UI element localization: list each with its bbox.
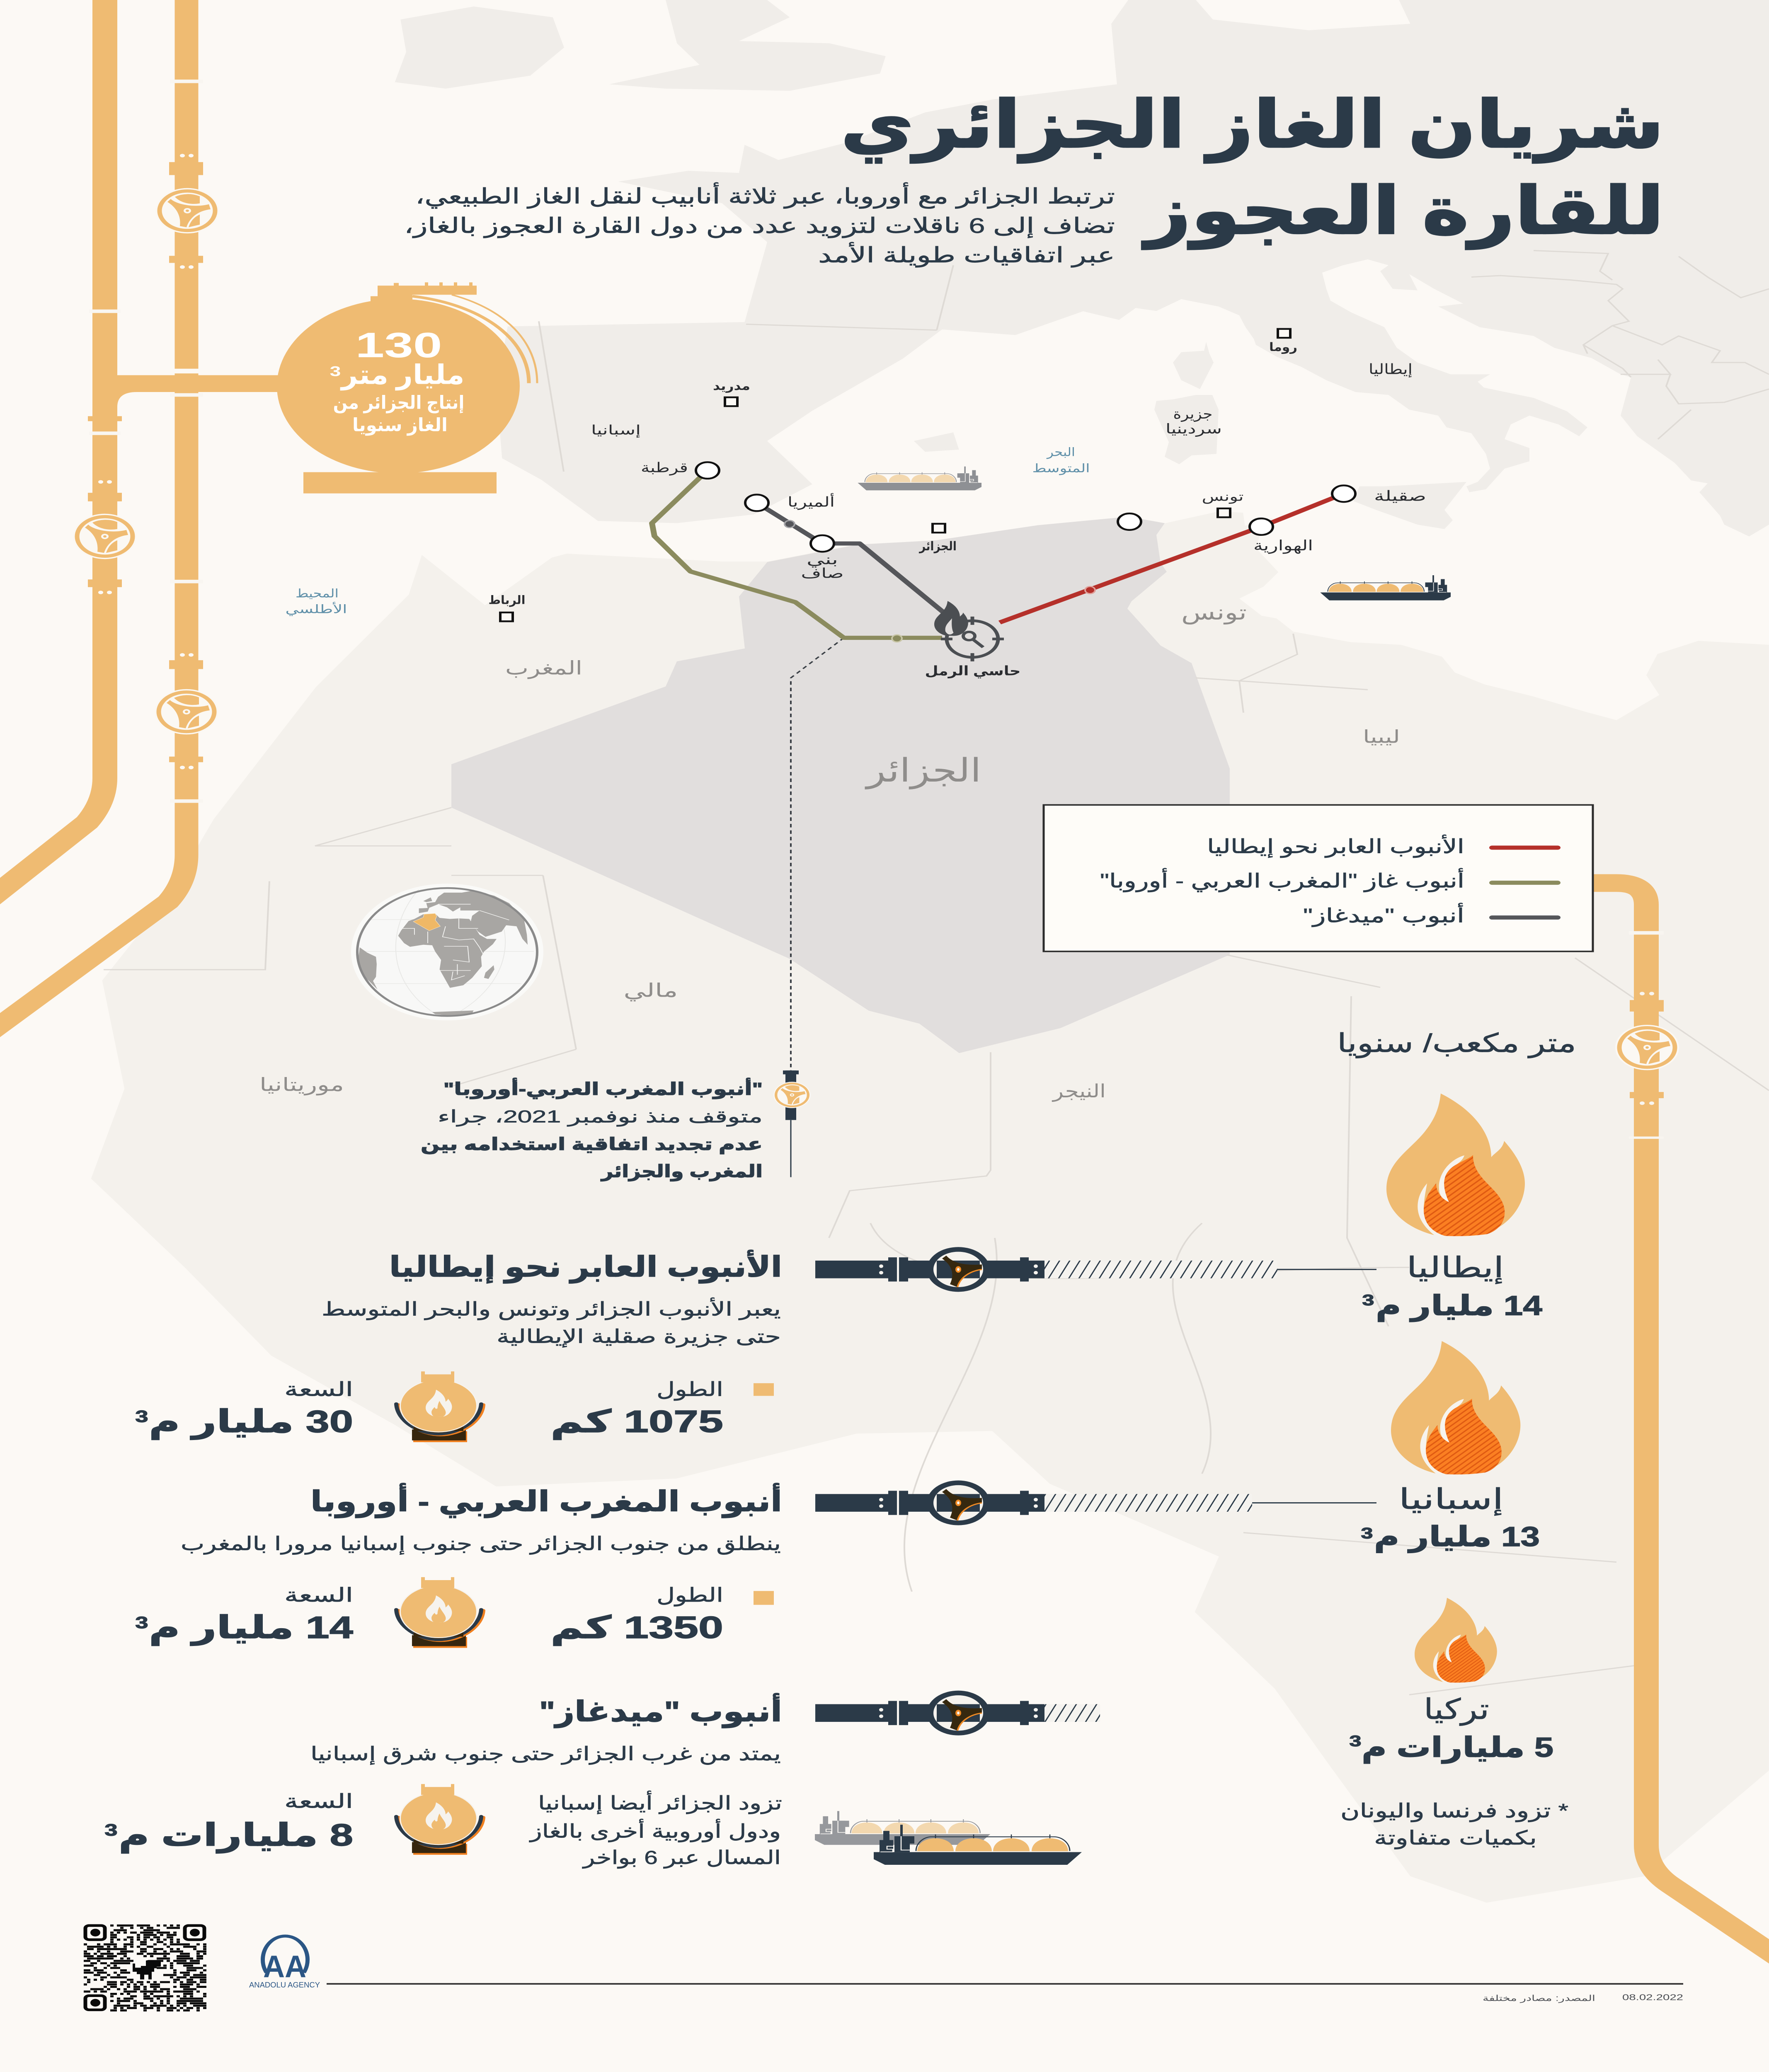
map labels: جزيرة	[1173, 407, 1212, 422]
stat: length: 1350 كم	[550, 1610, 723, 1646]
tank: unit: مليار متر	[340, 360, 464, 391]
pipe bar with hatch	[815, 1483, 1376, 1523]
stat: capacity: 3	[135, 1407, 148, 1426]
map labels: الأطلسي	[285, 602, 347, 616]
intro text: تضاف إلى 6 ناقلات لتزويد عدد من دول القارة العجوز بالغاز،	[404, 214, 1115, 238]
map labels: المحيط	[296, 587, 339, 600]
icon: grey LNG ship	[815, 1811, 990, 1845]
map: Mediterranean islands	[1154, 342, 1466, 529]
map labels: صاف	[801, 566, 843, 581]
icon: dark LNG ship	[874, 1825, 1082, 1865]
country: Spain: 13 مليار م	[1374, 1521, 1540, 1553]
map labels: الجزائر	[865, 753, 981, 790]
stat: capacity: السعة	[284, 1379, 353, 1400]
left pipeline A	[0, 0, 105, 911]
map: Africa	[91, 511, 1769, 1903]
title: شريان الغاز الجزائري	[841, 88, 1664, 163]
map: western and northern Europe	[497, 0, 1769, 523]
route: Maghreb-Europe pipeline	[652, 470, 942, 642]
stat: capacity	[135, 1379, 353, 1440]
map labels: الهوارية	[1253, 537, 1313, 554]
callout: Maghreb-Europe pipeline halted: "أنبوب المغرب العربي-أوروبا"	[443, 1078, 763, 1099]
stat: capacity: 30 مليار م	[149, 1404, 353, 1440]
source: المصدر: مصادر مختلفة	[1483, 1994, 1595, 2003]
icon: dark LNG ship on map	[1320, 575, 1451, 600]
right pipeline	[1593, 883, 1769, 1966]
country: Spain	[1361, 1483, 1540, 1553]
map labels: المغرب	[505, 657, 582, 679]
map labels: المتوسط	[1032, 462, 1090, 475]
unit heading: متر مكعب/ سنويا	[1337, 1029, 1576, 1058]
map labels: النيجر	[1052, 1081, 1106, 1102]
map labels: إيطاليا	[1369, 361, 1413, 378]
map labels: الرباط	[488, 594, 526, 607]
country: Turkey: 3	[1350, 1732, 1361, 1750]
pipe bar with hatch	[815, 1693, 1100, 1733]
section: Maghreb-Europe pipeline	[135, 1483, 1376, 1648]
map: Ireland and Great Britain	[395, 0, 886, 91]
icon: valve 1	[155, 188, 219, 233]
country: Italy	[1362, 1251, 1542, 1322]
Anadolu Agency logo	[249, 1936, 320, 1989]
icon: grey LNG ship on map	[858, 467, 981, 490]
stat: LNG text: ودول أوروبية أخرى بالغاز	[529, 1819, 781, 1842]
stat: LNG text: تزود الجزائر أيضا إسبانيا	[538, 1790, 782, 1814]
map labels: روما	[1269, 341, 1297, 354]
note: France and Greece: * تزود فرنسا واليونان	[1340, 1800, 1568, 1822]
icon: valve 3	[155, 689, 218, 734]
country: Italy: 3	[1362, 1291, 1374, 1309]
intro text: ترتبط الجزائر مع أوروبا، عبر ثلاثة أنابيب لنقل الغاز الطبيعي،	[415, 182, 1115, 209]
map labels: قرطبة	[641, 460, 688, 476]
map labels	[259, 341, 1426, 1102]
map labels: الجزائر	[919, 539, 957, 553]
note: France and Greece	[1340, 1800, 1568, 1849]
flame: Italy	[1386, 1094, 1525, 1236]
section: Medgaz pipeline: أنبوب "ميدغاز"	[539, 1693, 782, 1728]
stat: length	[550, 1584, 774, 1646]
stat: capacity: 3	[135, 1614, 148, 1632]
Anadolu Agency logo: AA	[263, 1950, 306, 1984]
country: Turkey: تركيا	[1424, 1693, 1489, 1726]
tank: caption line 1: إنتاج الجزائر من	[333, 392, 464, 413]
map labels: موريتانيا	[259, 1075, 344, 1095]
tank: caption line 2: الغاز سنويا	[352, 415, 448, 436]
pipe joints and flanges on the left pipelines	[88, 80, 203, 803]
icon: valve 2	[73, 514, 137, 559]
map: national borders	[104, 251, 1769, 1695]
map labels: صقيلة	[1374, 488, 1426, 504]
QR code	[84, 1926, 206, 2010]
map labels: ليبيا	[1363, 727, 1400, 747]
section: Trans-Mediterranean pipeline: الأنبوب العابر نحو إيطاليا	[389, 1250, 782, 1284]
intro text: عبر اتفاقيات طويلة الأمد	[818, 242, 1115, 267]
date: 08.02.2022	[1622, 1993, 1683, 2002]
station markers	[696, 462, 1355, 552]
map labels: بني	[807, 552, 838, 568]
map labels: إسبانيا	[591, 423, 641, 438]
map labels: سردينيا	[1166, 422, 1222, 437]
map: Balearic islands	[914, 432, 959, 452]
route: Trans-Mediterranean pipeline	[1000, 494, 1344, 622]
legend: أنبوب "ميدغاز"	[1303, 903, 1464, 927]
globe locator	[351, 884, 543, 1020]
stat: LNG text: المسال عبر 6 بواخر	[582, 1847, 781, 1869]
icon: Hassi R'Mel gas field	[934, 601, 1004, 661]
section: Maghreb-Europe pipeline: ينطلق من جنوب الجزائر حتى جنوب إسبانيا مرورا بالمغرب	[181, 1533, 781, 1555]
icon: gas tank	[396, 1577, 483, 1648]
callout: Maghreb-Europe pipeline halted: متوقف منذ نوفمبر 2021، جراء	[438, 1107, 763, 1127]
stat: LNG text	[529, 1790, 782, 1869]
stat: length: 1075 كم	[550, 1404, 723, 1440]
section: Trans-Mediterranean pipeline: حتى جزيرة صقلية الإيطالية	[497, 1326, 781, 1348]
QR centre dinosaur	[133, 1960, 161, 1980]
country: Spain: إسبانيا	[1398, 1483, 1503, 1516]
left pipeline B	[0, 0, 187, 1043]
map labels: تونس	[1181, 601, 1247, 625]
production tank	[277, 282, 537, 494]
map labels: البحر	[1046, 446, 1075, 459]
country: Turkey	[1350, 1693, 1553, 1764]
legend: الأنبوب العابر نحو إيطاليا	[1207, 834, 1464, 858]
callout: Maghreb-Europe pipeline halted: عدم تجديد اتفاقية استخدامه بين	[421, 1135, 763, 1155]
note: France and Greece: بكميات متفاوتة	[1374, 1827, 1537, 1849]
pipe bar with hatch	[815, 1249, 1376, 1290]
map: Italy and the Balkans	[1119, 251, 1769, 536]
stat: capacity	[135, 1584, 353, 1646]
icon: gas tank	[396, 1784, 483, 1855]
stat: length	[550, 1379, 774, 1440]
intro text	[404, 182, 1115, 267]
stat: capacity	[104, 1791, 353, 1854]
stat: length: الطول	[657, 1584, 723, 1606]
icon: gas tank	[396, 1371, 483, 1442]
tank: 130 figure: 130	[355, 326, 442, 365]
map labels: حاسي الرمل	[925, 664, 1020, 678]
section: Maghreb-Europe pipeline: أنبوب المغرب العربي - أوروبا	[310, 1483, 782, 1518]
section: Medgaz pipeline: يمتد من غرب الجزائر حتى جنوب شرق إسبانيا	[310, 1743, 781, 1765]
right pipeline joints	[1629, 931, 1664, 1139]
icon: valve on right pipeline	[1615, 1025, 1679, 1070]
section: Trans-Mediterranean pipeline	[135, 1249, 1376, 1442]
country: Spain: 3	[1361, 1525, 1373, 1542]
stat: capacity: 14 مليار م	[149, 1610, 353, 1646]
callout icon: small pipe and valve	[773, 1070, 811, 1177]
section: Trans-Mediterranean pipeline: يعبر الأنبوب الجزائر وتونس والبحر المتوسط	[322, 1297, 781, 1320]
map labels: مدريد	[713, 380, 750, 393]
legend	[1044, 805, 1593, 951]
country: Turkey: 5 مليارات م	[1362, 1732, 1553, 1764]
legend: أنبوب غاز "المغرب العربي - أوروبا"	[1100, 868, 1464, 892]
stat: capacity: 8 مليارات م	[119, 1818, 353, 1854]
section: Medgaz pipeline	[104, 1693, 1100, 1869]
title	[841, 88, 1664, 249]
stat: length: الطول	[657, 1379, 723, 1401]
route: Medgaz pipeline	[757, 503, 945, 614]
stat: capacity: 3	[104, 1821, 118, 1840]
dashed connector to callout	[791, 638, 844, 1070]
flame: Spain	[1391, 1341, 1520, 1474]
stat: capacity: السعة	[284, 1584, 353, 1606]
tank: unit superscript: 3	[330, 363, 341, 379]
flame: Turkey	[1415, 1598, 1497, 1682]
stat: capacity: السعة	[284, 1791, 353, 1812]
map labels: مالي	[623, 980, 678, 1002]
country: Italy: 14 مليار م	[1376, 1290, 1542, 1322]
footer rule	[327, 1983, 1683, 1985]
map labels: تونس	[1202, 489, 1243, 504]
title: للقارة العجوز	[1142, 174, 1664, 249]
callout: Maghreb-Europe pipeline halted: المغرب والجزائر	[600, 1162, 763, 1181]
connector from pipeline to tank	[117, 375, 286, 407]
capital city markers	[500, 329, 1290, 621]
map labels: ألميريا	[788, 493, 835, 510]
callout: Maghreb-Europe pipeline halted	[421, 1070, 811, 1181]
Anadolu Agency logo: ANADOLU AGENCY	[249, 1980, 320, 1989]
map: Algeria highlighted	[451, 517, 1230, 1053]
country: Italy: إيطاليا	[1406, 1251, 1504, 1284]
